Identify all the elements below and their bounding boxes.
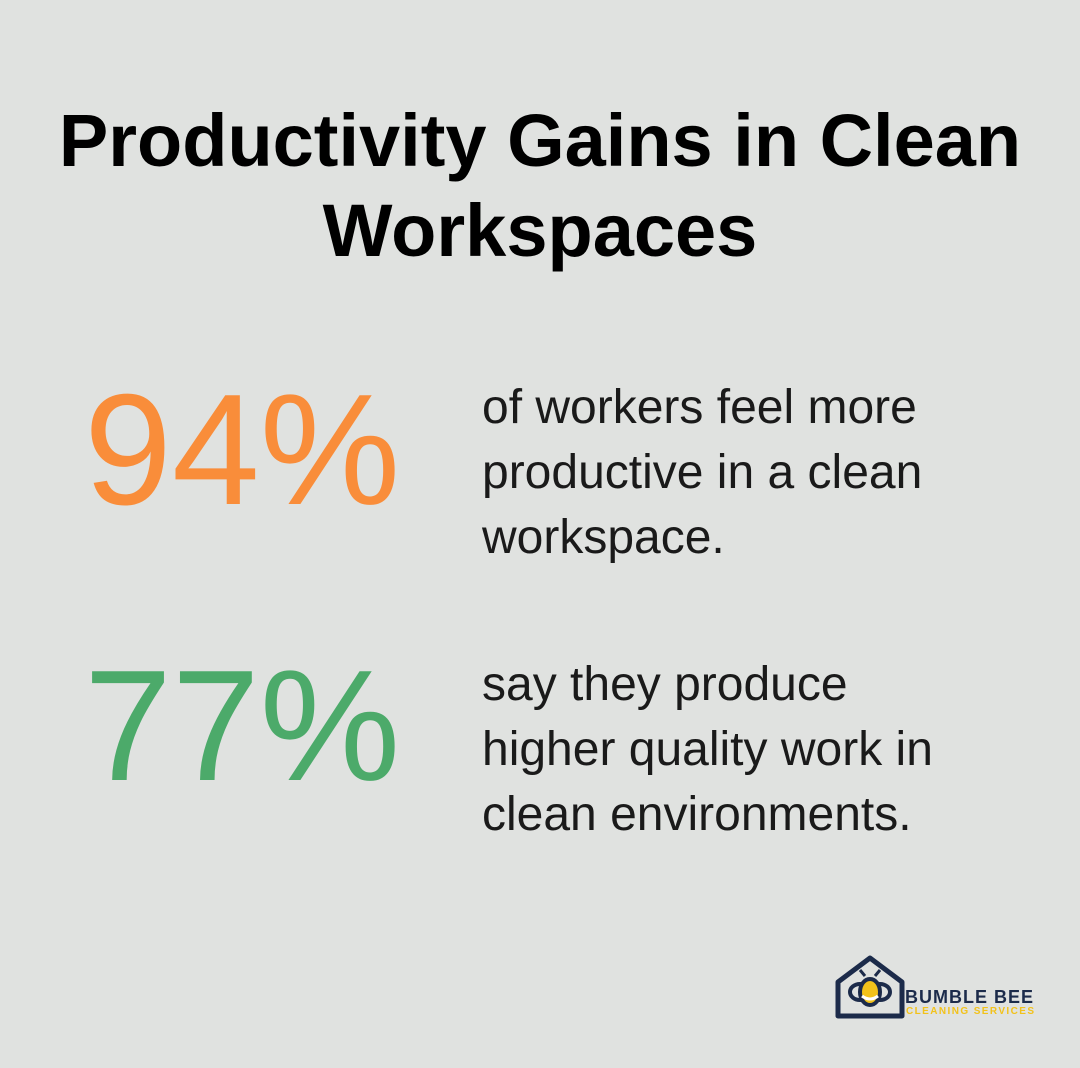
text: 77% description: say they produce [482, 658, 848, 711]
icon: house with bee [838, 958, 902, 1016]
text: 77% description [482, 658, 933, 841]
title [59, 99, 1021, 272]
title: Workspaces [323, 189, 757, 272]
text: tagline: CLEANING SERVICES [906, 1006, 1034, 1017]
logo [836, 956, 1034, 1018]
text: 94% description: of workers feel more [482, 381, 917, 434]
text: 77% description: clean environments. [482, 788, 912, 841]
text: 94% description [482, 381, 922, 564]
text: brand name: BUMBLE BEE [905, 987, 1033, 1007]
title: Productivity Gains in Clean [59, 99, 1021, 182]
stat: 77%: 77% [84, 638, 400, 814]
text: 77% description: higher quality work in [482, 723, 933, 776]
text: 94% description: productive in a clean [482, 446, 922, 499]
stat: 94%: 94% [84, 362, 400, 538]
text: 94% description: workspace. [482, 511, 725, 564]
